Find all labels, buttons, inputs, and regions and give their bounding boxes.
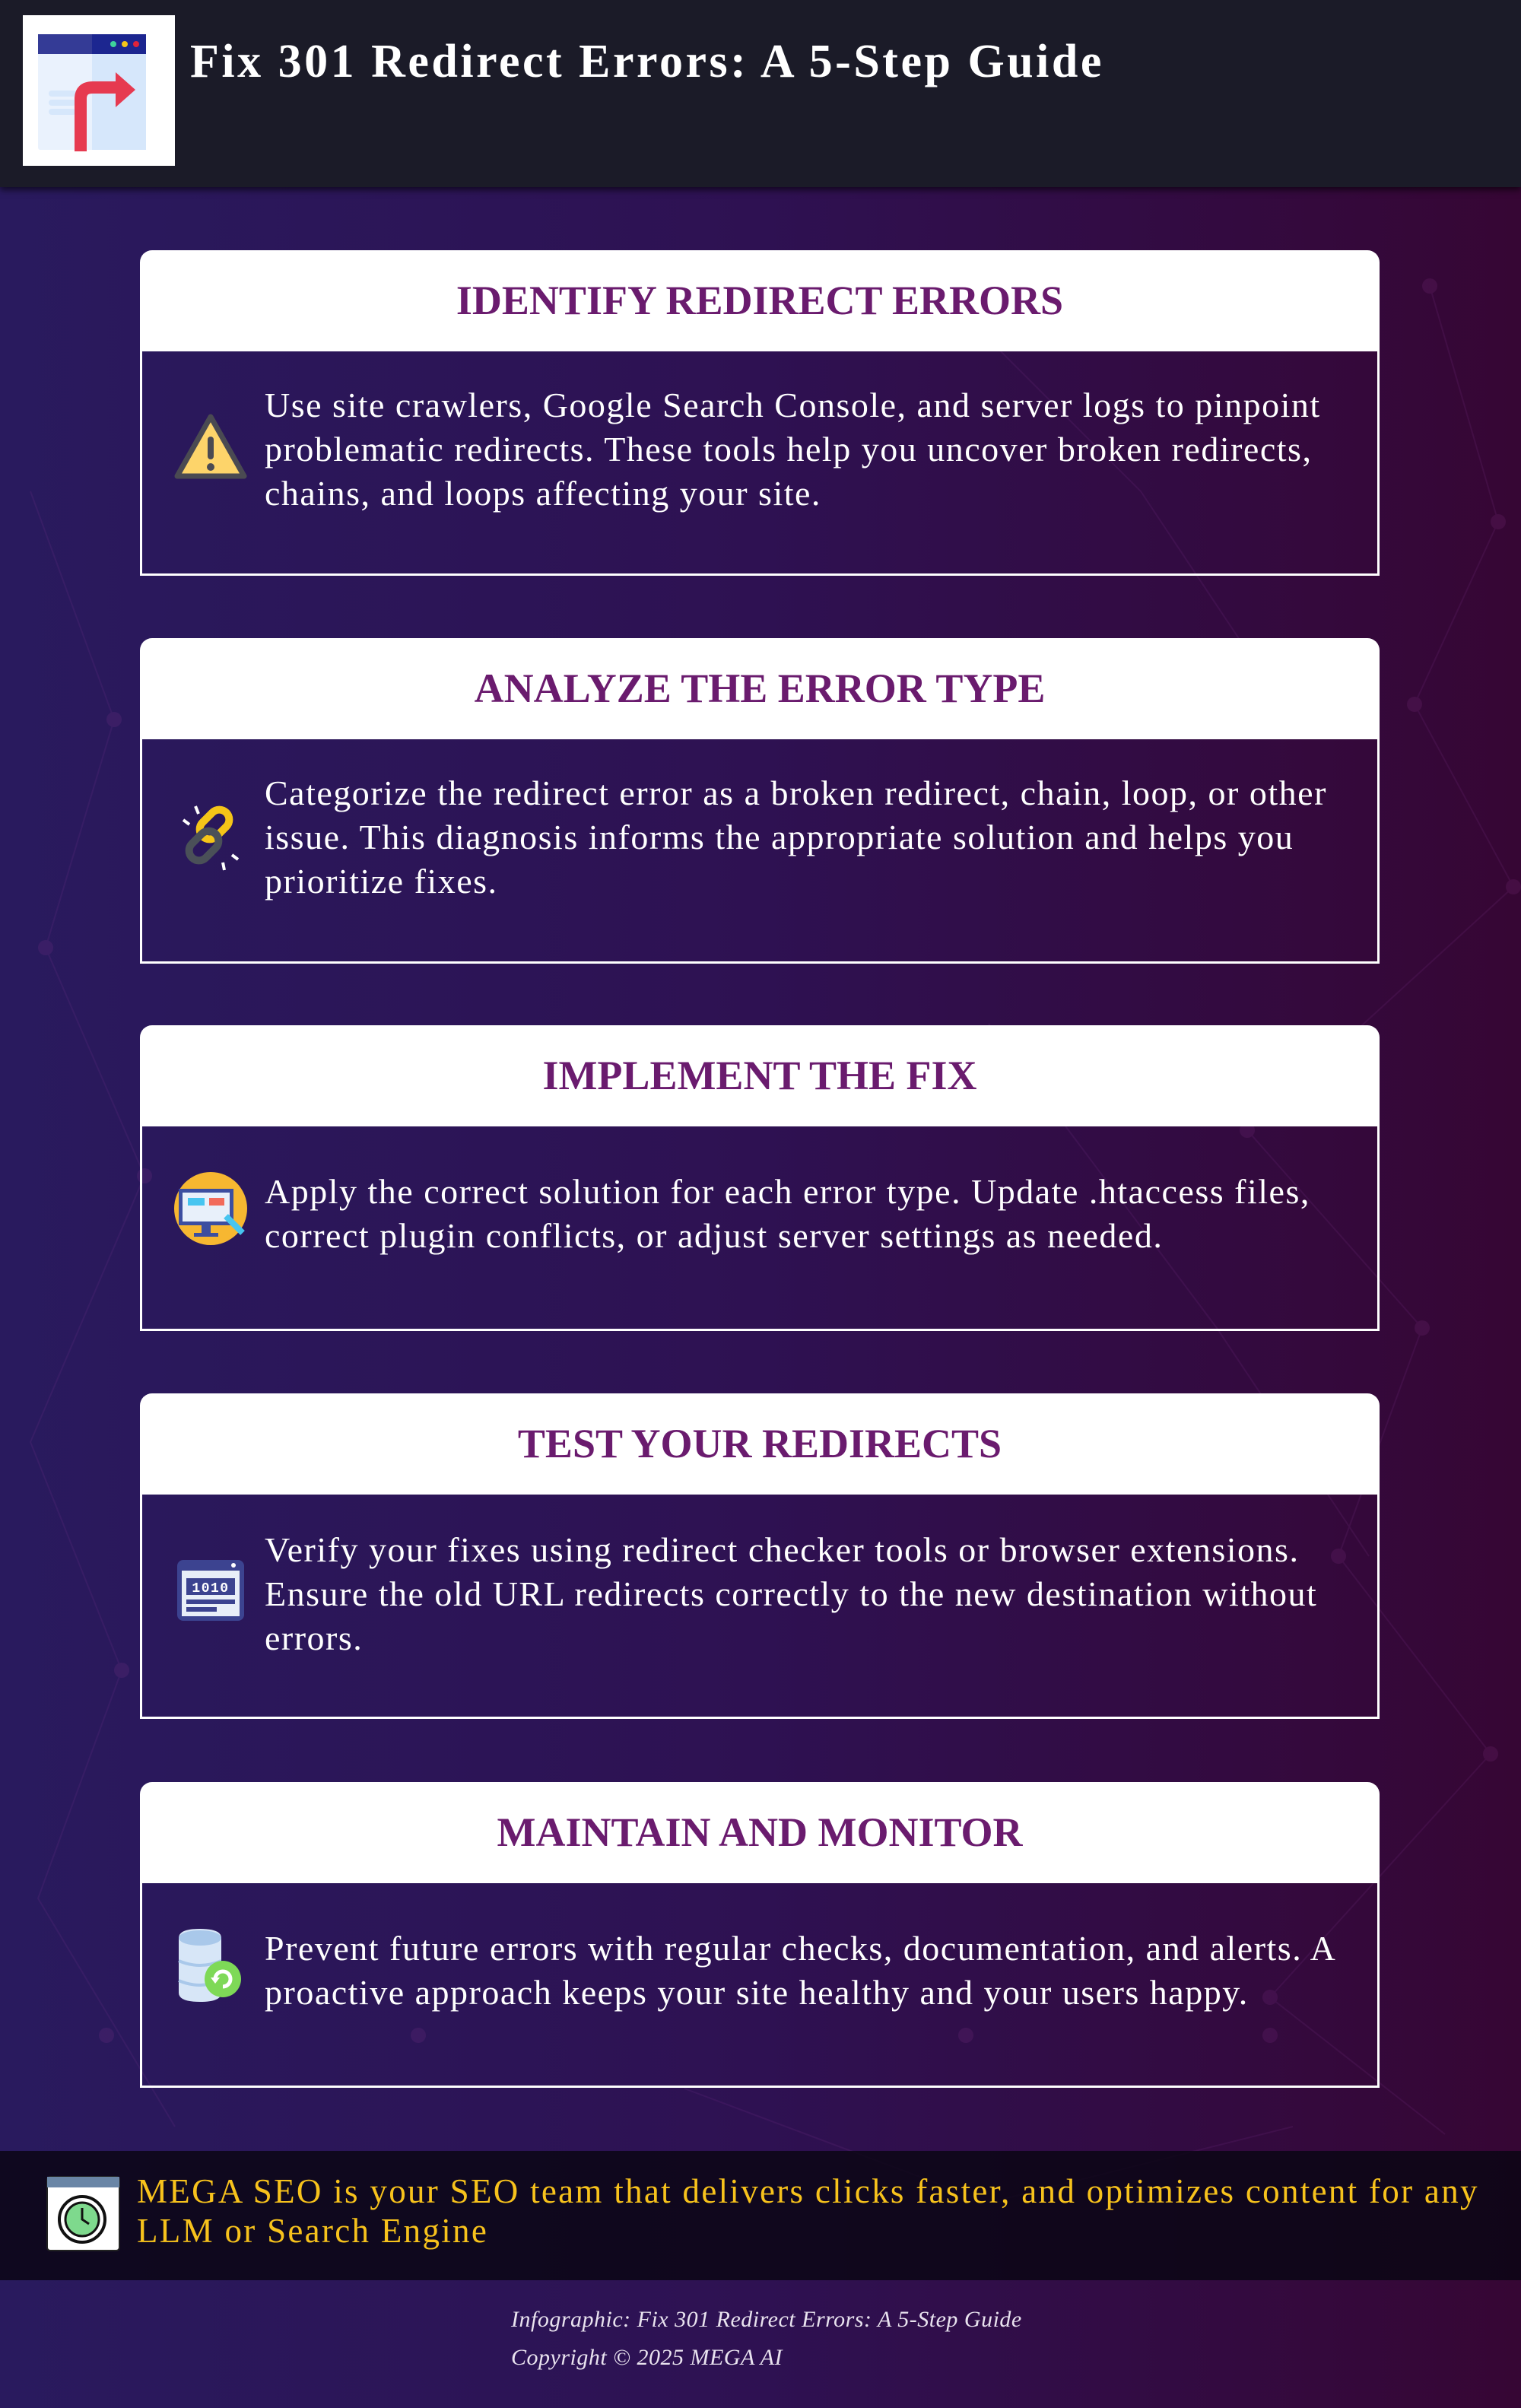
text bbox=[265, 774, 1327, 901]
text: prioritize fixes. bbox=[265, 862, 498, 901]
text: Apply the correct solution for each error type. Update .htaccess files, bbox=[265, 1172, 1310, 1211]
text: LLM or Search Engine bbox=[137, 2212, 488, 2250]
text bbox=[265, 386, 1321, 513]
text: Verify your fixes using redirect checker tools or browser extensions. bbox=[265, 1530, 1299, 1569]
panel: analyze the error type bbox=[140, 638, 1380, 964]
icon: code window: 1010 bbox=[192, 1581, 230, 1596]
panel: identify redirect errors bbox=[140, 250, 1380, 576]
icon: code window bbox=[177, 1560, 244, 1621]
heading bbox=[140, 1025, 1380, 1126]
text: Prevent future errors with regular checks, documentation, and alerts. A bbox=[265, 1929, 1336, 1968]
heading bbox=[140, 638, 1380, 739]
panel: test your redirects bbox=[140, 1393, 1380, 1719]
heading: ANALYZE THE ERROR TYPE bbox=[475, 666, 1045, 711]
text: Use site crawlers, Google Search Console, and server logs to pinpoint bbox=[265, 386, 1321, 424]
text bbox=[265, 1929, 1336, 2012]
panel: implement the fix bbox=[140, 1025, 1380, 1331]
copyright: Copyright © 2025 MEGA AI bbox=[511, 2345, 783, 2370]
icon: redirect logo bbox=[23, 15, 175, 166]
heading bbox=[140, 1393, 1380, 1495]
icon: clock window bbox=[46, 2176, 120, 2251]
text: MEGA SEO is your SEO team that delivers clicks faster, and optimizes content for any bbox=[137, 2172, 1479, 2210]
heading bbox=[140, 250, 1380, 351]
footer credit: Infographic: Fix 301 Redirect Errors: A 5-Step Guide bbox=[511, 2307, 1022, 2332]
header bbox=[0, 0, 1521, 187]
text bbox=[137, 2172, 1479, 2250]
icon: broken link bbox=[183, 805, 239, 870]
text: Categorize the redirect error as a broken redirect, chain, loop, or other bbox=[265, 774, 1327, 812]
text bbox=[265, 1172, 1310, 1255]
text: proactive approach keeps your site healthy and your users happy. bbox=[265, 1973, 1249, 2012]
icon: warning bbox=[175, 414, 246, 479]
heading bbox=[140, 1782, 1380, 1883]
text: chains, and loops affecting your site. bbox=[265, 474, 821, 513]
callout: MEGA SEO banner bbox=[0, 2151, 1521, 2280]
text: correct plugin conflicts, or adjust server settings as needed. bbox=[265, 1216, 1163, 1255]
heading: IMPLEMENT THE FIX bbox=[542, 1053, 977, 1098]
text: Ensure the old URL redirects correctly to the new destination without bbox=[265, 1574, 1317, 1613]
icon: computer fix bbox=[174, 1172, 247, 1245]
title: Fix 301 Redirect Errors: A 5-Step Guide bbox=[190, 36, 1104, 87]
text bbox=[265, 1530, 1317, 1657]
heading: IDENTIFY REDIRECT ERRORS bbox=[456, 278, 1063, 323]
text: problematic redirects. These tools help you uncover broken redirects, bbox=[265, 430, 1312, 469]
heading: TEST YOUR REDIRECTS bbox=[518, 1421, 1002, 1466]
text: issue. This diagnosis informs the appropriate solution and helps you bbox=[265, 818, 1294, 856]
panel: maintain and monitor bbox=[140, 1782, 1380, 2088]
text: errors. bbox=[265, 1619, 363, 1657]
heading: MAINTAIN AND MONITOR bbox=[497, 1809, 1023, 1855]
icon: database sync bbox=[178, 1929, 241, 2002]
